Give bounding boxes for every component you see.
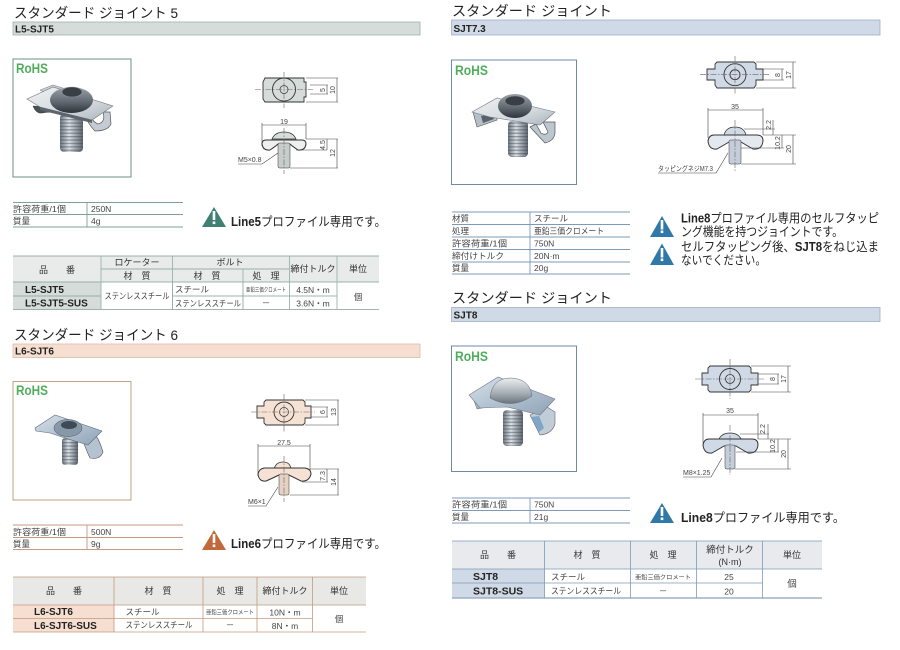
parts table: L6-SJT6 [13,577,366,632]
parts table: L6-SJT6: 単位 [330,585,348,596]
parts table: L5-SJT5: － [262,298,270,308]
product photo: SJT8 [452,346,576,472]
spec table: SJT7.3: 締付けトルク [452,251,504,261]
product photo: SJT7.3: RoHS [455,63,488,78]
parts table: L5-SJT5: スチール [175,284,210,294]
spec table: SJT7.3: 20g [534,263,548,273]
parts table: L5-SJT5: ロケーター [114,258,160,268]
parts table: L6-SJT6: 品 番 [46,585,82,596]
spec table: L6-SJT6 [13,525,183,550]
parts table: SJT8: SJT8-SUS [473,586,523,598]
parts table: SJT8: (N·m) [718,557,742,567]
parts table: SJT8: 品 番 [480,549,516,560]
spec table: L6-SJT6: 許容荷重/1個 [13,527,66,537]
spec table: SJT8: 許容荷重/1個 [452,500,507,510]
parts table: L6-SJT6: L6-SJT6-SUS [34,621,97,632]
spec table: L5-SJT5: 250N [91,204,111,214]
dimension drawing: L5-SJT5: M5×0.8 [238,157,262,164]
title: standard joint: スタンダード ジョイント [452,3,612,19]
header bar: SJT8: SJT8 [454,310,478,322]
parts table: SJT8: 材 質 [573,549,601,560]
dimension drawing: SJT7.3: タッピングネジM7.3 [658,164,713,173]
parts table: L6-SJT6: ステンレススチール [126,620,193,630]
dimension drawing: L6-SJT6: 6 [320,410,327,414]
parts table: L5-SJT5: 材 質 [193,270,221,281]
header bar: L6-SJT6 [13,344,420,358]
spec table: SJT8 [452,498,630,523]
dimension drawing: L5-SJT5 [238,72,338,174]
product photo: L5-SJT5: RoHS [16,61,48,76]
title: standard joint 5: スタンダード ジョイント 5 [14,5,178,21]
dimension drawing: SJT7.3: 35 [731,104,739,111]
header bar: SJT8 [452,308,880,322]
parts table: SJT8: ステンレススチール [551,586,621,596]
dimension drawing: L6-SJT6: 13 [331,408,338,416]
dimension drawing: SJT8: 17 [781,375,788,383]
dimension drawing: SJT7.3: 2.2 [766,120,773,130]
dimension drawing: L6-SJT6: M6×1 [248,499,266,506]
spec table: SJT7.3: 20N·m [534,251,560,261]
spec table: L5-SJT5: 許容荷重/1個 [13,204,66,214]
dimension drawing: SJT7.3 [658,56,796,173]
parts table: L5-SJT5: 3.6N・m [296,298,330,308]
dimension drawing: L5-SJT5: 19 [280,119,288,126]
panel: SJT8 [452,290,880,598]
product photo: L5-SJT5 [13,59,131,177]
parts table: L5-SJT5: 処 理 [252,270,280,281]
callout: Line5 only: Line5プロファイル専用です。 [231,215,386,229]
spec table: SJT8: 質量 [452,512,470,522]
parts table: SJT8: 亜鉛三価クロメート [635,574,691,582]
product photo: L6-SJT6: RoHS [16,383,48,398]
dimension drawing: L6-SJT6: 27.5 [277,440,291,447]
parts table: SJT8: 処 理 [649,549,677,560]
parts table: L6-SJT6: スチール [126,607,160,617]
dimension drawing: SJT8: 35 [726,408,734,415]
parts table: L6-SJT6: 処 理 [216,585,244,596]
parts table: L5-SJT5: 品 番 [39,264,75,275]
panel: L5-SJT5 [13,5,420,310]
parts table: L6-SJT6: 10N・m [269,608,301,618]
dimension drawing: SJT7.3: 10.2 [775,136,782,150]
callout: Line6 only [202,530,386,551]
parts table: L6-SJT6: 個 [335,614,343,624]
callout: Line5 only [202,207,386,229]
dimension drawing: SJT8 [683,359,791,477]
callout: self-tapping notes: Line8プロファイル専用のセルフタッピ [681,212,879,226]
spec table: SJT7.3 [452,212,630,274]
spec table: SJT7.3: スチール [534,214,569,224]
product photo: SJT7.3 [452,60,576,184]
spec table: L6-SJT6: 9g [91,539,101,549]
spec table: SJT7.3: 材質 [452,214,470,224]
parts table: SJT8: 20 [724,586,734,596]
parts table: L5-SJT5: ステンレススチール [104,291,170,301]
dimension drawing: L5-SJT5: 4.5 [320,140,327,150]
panel: SJT7.3 [452,3,880,274]
parts table: L6-SJT6: 8N・m [272,621,298,631]
header bar: SJT7.3 [452,20,880,35]
callout: Line8 only [650,503,845,525]
dimension drawing: L6-SJT6: 7.3 [320,471,327,481]
parts table: SJT8: スチール [551,572,586,582]
callout: Line6 only: Line6プロファイル専用です。 [231,537,386,551]
parts table: L6-SJT6: － [226,620,234,630]
callout: self-tapping notes [650,212,879,268]
dimension drawing: L5-SJT5: 12 [330,149,337,157]
parts table: L5-SJT5 [13,256,379,310]
parts table: L5-SJT5: ステンレススチール [175,298,241,308]
parts table: SJT8: SJT8 [473,571,498,583]
title: standard joint: スタンダード ジョイント [452,290,612,306]
parts table: L5-SJT5: 材 質 [123,270,151,281]
spec table: SJT7.3: 亜鉛三価クロメート [534,226,604,236]
spec table: SJT7.3: 許容荷重/1個 [452,238,507,248]
dimension drawing: SJT7.3: 20 [786,145,793,153]
dimension drawing: L6-SJT6: 14 [331,478,338,486]
spec table: SJT8: 750N [534,500,554,510]
spec table: SJT7.3: 750N [534,238,554,248]
dimension drawing: L6-SJT6 [248,394,339,506]
parts table: L6-SJT6: 亜鉛三価クロメート [206,608,254,616]
dimension drawing: L5-SJT5: 5 [320,88,327,92]
parts table: L5-SJT5: 締付トルク [290,263,336,274]
dimension drawing: SJT7.3: 17 [786,71,793,79]
callout: Line8 only: Line8プロファイル専用です。 [681,511,845,525]
parts table: SJT8: － [659,586,667,596]
dimension drawing: SJT8: M8×1.25 [683,470,711,477]
spec table: L5-SJT5: 質量 [13,216,31,226]
spec table: L6-SJT6: 500N [91,527,111,537]
parts table: L5-SJT5: L5-SJT5 [25,285,64,296]
parts table: L6-SJT6: L6-SJT6 [34,607,73,618]
header bar: SJT7.3: SJT7.3 [454,24,486,35]
dimension drawing: SJT7.3: 8 [775,73,782,77]
parts table: SJT8: 締付トルク [706,544,754,556]
dimension drawing: SJT8: 10.2 [770,439,777,453]
callout: self-tapping notes: ング機能を持つジョイントです。 [681,224,843,239]
parts table: L5-SJT5: ボルト [216,258,244,268]
parts table: SJT8: 単位 [783,549,801,560]
dimension drawing: SJT8: 20 [781,450,788,458]
product photo: SJT8: RoHS [455,349,488,364]
parts table: L6-SJT6: 締付トルク [262,585,308,596]
parts table: SJT8: 個 [787,578,797,590]
spec table: L6-SJT6: 質量 [13,539,31,549]
dimension drawing: SJT8: 2.2 [760,424,767,434]
dimension drawing: L5-SJT5: 10 [330,86,337,94]
panel: L6-SJT6 [13,327,420,632]
parts table: L5-SJT5: 単位 [349,263,367,274]
spec table: SJT8: 21g [534,512,548,522]
parts table: SJT8 [452,541,822,598]
spec table: SJT7.3: 処理 [452,226,470,236]
parts table: L5-SJT5: L5-SJT5-SUS [25,298,88,310]
parts table: L6-SJT6: 材 質 [144,585,172,596]
callout: self-tapping notes: セルフタッピング後、SJT8をねじ込ま [681,240,879,254]
parts table: L5-SJT5: 亜鉛三価クロメート [246,286,286,294]
dimension drawing: SJT8: 8 [770,377,777,381]
callout: self-tapping notes: ないでください。 [681,254,766,268]
spec table: SJT7.3: 質量 [452,263,470,273]
header bar: L5-SJT5 [13,22,420,36]
header bar: L5-SJT5: L5-SJT5 [15,24,54,36]
header bar: L6-SJT6: L6-SJT6 [15,346,54,358]
product photo: L6-SJT6 [13,382,131,500]
spec table: L5-SJT5: 4g [91,216,101,226]
parts table: SJT8: 25 [724,572,734,582]
title: standard joint 6: スタンダード ジョイント 6 [14,327,178,343]
spec table: L5-SJT5 [13,202,183,227]
parts table: L5-SJT5: 個 [354,292,362,302]
parts table: L5-SJT5: 4.5N・m [296,285,330,295]
